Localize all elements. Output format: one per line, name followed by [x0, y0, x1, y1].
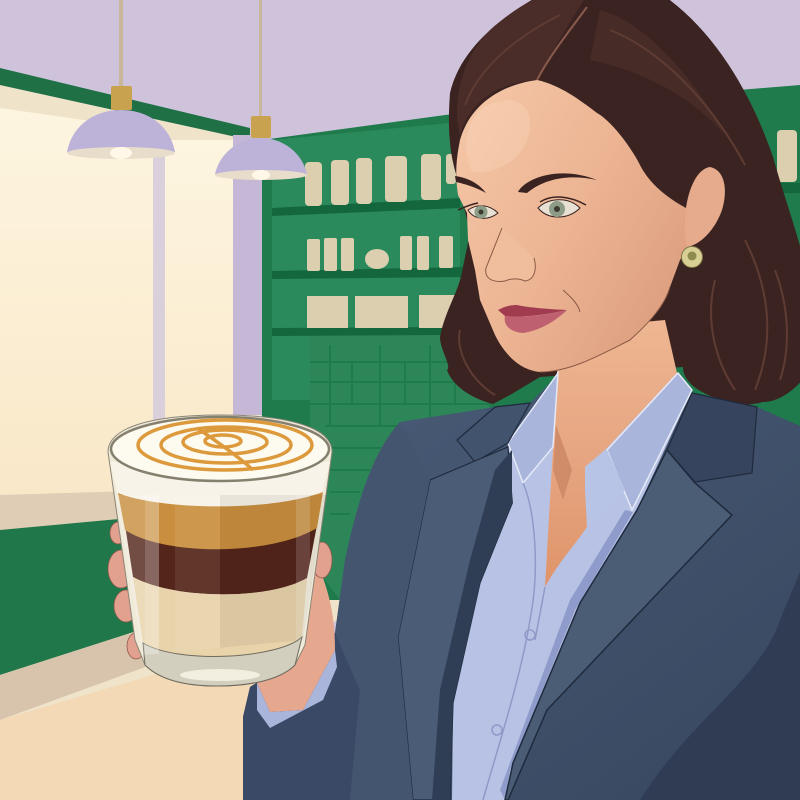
lapel right lower: [505, 450, 732, 800]
shelf jars top: [305, 130, 797, 206]
finger two: [108, 550, 134, 588]
neck and chest: [545, 320, 677, 587]
shirt cuff: [257, 650, 337, 728]
finger four: [127, 633, 145, 659]
face: [456, 80, 690, 372]
shelf jars middle: [307, 218, 788, 271]
hand behind cup: [108, 522, 335, 712]
shirt: [452, 373, 692, 800]
sleeve: [243, 633, 360, 800]
blazer shading: [375, 560, 800, 800]
thumb: [312, 542, 332, 578]
eyebrow right: [518, 173, 597, 193]
green shelving unit: [262, 85, 800, 600]
latte glass: [108, 415, 332, 686]
hair: [440, 0, 800, 405]
tile lines: [310, 345, 490, 514]
caramel layer: [118, 492, 323, 549]
eye right: [538, 197, 586, 217]
ear: [685, 167, 725, 247]
lapel left lower: [398, 447, 512, 800]
left blazer body edge: [335, 422, 430, 800]
shirt collar right: [607, 373, 692, 510]
finger three: [114, 590, 138, 622]
shirt buttons and placket: [483, 483, 545, 800]
glass base: [143, 637, 302, 686]
glass light bands: [118, 495, 326, 655]
pendant lamp right: [215, 0, 307, 180]
shirt inner collar: [585, 450, 625, 527]
espresso layer: [125, 525, 317, 594]
base highlight: [180, 669, 260, 681]
lapel right upper: [667, 393, 757, 482]
forehead highlight: [466, 100, 530, 172]
foam top: [111, 417, 329, 481]
nose: [486, 228, 535, 281]
woman: [243, 0, 800, 800]
latte art: [138, 420, 312, 470]
hair highlights: [457, 0, 787, 395]
part line: [537, 7, 587, 80]
smile line and jaw: [540, 287, 670, 372]
cream layer: [110, 462, 330, 495]
eye left: [458, 203, 498, 218]
eyebrow left: [455, 176, 486, 193]
finger one: [110, 522, 126, 544]
lapel left shadow: [432, 450, 512, 800]
lapel left upper: [457, 403, 530, 462]
lips: [498, 305, 567, 333]
shelf boards: [272, 183, 800, 336]
neck shadow: [553, 425, 572, 500]
milk layer: [133, 577, 307, 656]
shirt collar left: [508, 373, 558, 483]
shirt shadow: [500, 510, 633, 800]
blazer: [243, 373, 800, 800]
left wall with windows: [0, 68, 340, 720]
pendant lamp left: [67, 0, 175, 159]
earring: [682, 246, 702, 268]
shelf boxes bottom: [307, 295, 455, 328]
